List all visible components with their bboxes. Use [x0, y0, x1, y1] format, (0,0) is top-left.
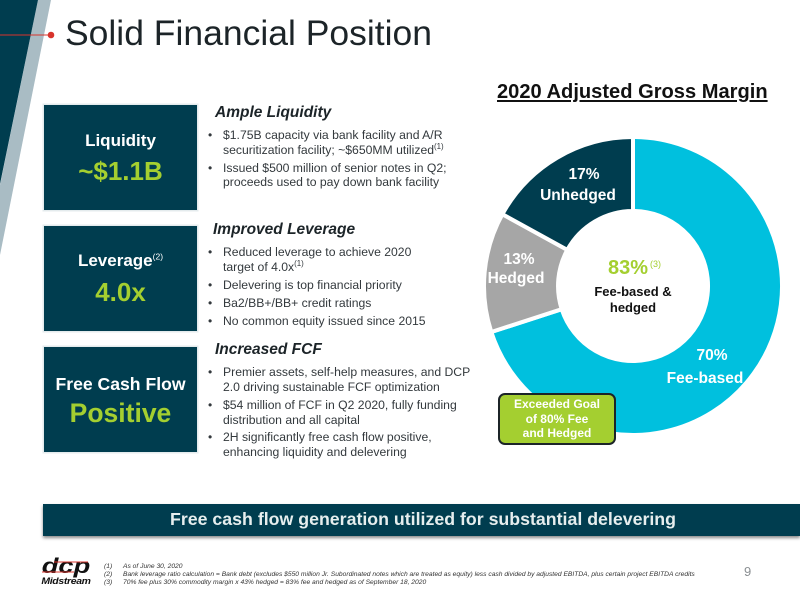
panel: leverage: [44, 226, 197, 331]
heading: improved leverage: Improved Leverage: [213, 221, 355, 238]
footnotes: As of June 30, 2020: [123, 563, 182, 570]
panel: free cash flow: [44, 347, 197, 452]
page number: 9: [744, 564, 751, 579]
free cash flow label: Free Cash Flow: [55, 374, 186, 394]
bullets: increased fcf: $54 million of FCF in Q2 2020, fully funding: [223, 398, 457, 412]
logo red stripes: [42, 562, 88, 572]
callout: exceeded goal: Exceeded Goal: [514, 397, 600, 411]
label: unhedged: [540, 166, 616, 204]
footnotes: 70% fee plus 30% commodity margin x 43% hedged = 83% fee and hedged as of September 18, 2020: [123, 579, 426, 586]
bullets: improved leverage: Delevering is top financial priority: [223, 278, 402, 292]
label: hedged: Hedged: [488, 270, 544, 287]
bullets: increased fcf: Premier assets, self-help measures, and DCP: [223, 365, 470, 379]
bullets: increased fcf: 2H significantly free cash flow positive,: [223, 430, 432, 444]
bullets: increased fcf: •: [208, 430, 212, 444]
title: Solid Financial Position: [65, 13, 432, 53]
free cash flow value: Positive: [70, 398, 171, 428]
liquidity value: ~$1.1B: [78, 156, 163, 186]
bullets: ample liquidity: securitization facility; ~$650MM utilized(1): [223, 142, 444, 157]
bullets: ample liquidity: $1.75B capacity via bank facility and A/R: [223, 128, 442, 142]
panel: liquidity: [44, 105, 197, 210]
bullets: ample liquidity: [208, 128, 447, 189]
center label: hedged: [610, 300, 656, 314]
heading: increased fcf: Increased FCF: [215, 341, 322, 358]
callout: exceeded goal: and Hedged: [523, 426, 591, 440]
logo letters: dcp: [42, 555, 90, 578]
liquidity label: Liquidity: [85, 131, 156, 150]
label: fee-based: 70%: [696, 347, 728, 364]
chart heading: 2020 Adjusted Gross Margin: [497, 81, 768, 103]
bullets: improved leverage: [208, 245, 426, 328]
bullets: improved leverage: Reduced leverage to achieve 2020: [223, 245, 411, 259]
bullets: increased fcf: distribution and all capital: [223, 413, 360, 427]
left accent shape: [0, 0, 51, 254]
footnotes: (3): [104, 579, 112, 586]
footnotes: (2): [104, 571, 112, 578]
donut chart: [486, 139, 780, 433]
bullets: improved leverage: •: [208, 278, 212, 292]
center label: Fee-based &: [594, 284, 672, 299]
label: hedged: [488, 251, 544, 287]
callout: exceeded goal: of 80% Fee: [526, 412, 588, 426]
label: fee-based: [667, 347, 743, 387]
bullets: increased fcf: •: [208, 365, 212, 379]
bullets: improved leverage: No common equity issued since 2015: [223, 314, 426, 328]
bullets: improved leverage: •: [208, 314, 212, 328]
banner: [43, 504, 800, 536]
bullets: increased fcf: •: [208, 398, 212, 412]
banner: Free cash flow generation utilized for substantial delevering: [170, 509, 676, 529]
label: hedged: 13%: [503, 251, 535, 268]
leverage value: 4.0x: [95, 277, 146, 307]
footnotes: [104, 563, 695, 586]
label: fee-based: Fee-based: [667, 370, 743, 387]
bullets: ample liquidity: •: [208, 128, 212, 142]
logo: dcp midstream: [41, 555, 91, 587]
callout: exceeded goal: [498, 393, 616, 445]
bullets: improved leverage: target of 4.0x(1): [223, 259, 304, 274]
bullets: increased fcf: 2.0 driving sustainable FCF optimization: [223, 380, 440, 394]
footnotes: Bank leverage ratio calculation = Bank debt (excludes $550 million Jr. Subordinated notes which are treated as equity) less cash divided by adjusted EBITDA, plus certain project EBITDA credits: [123, 571, 695, 578]
label: unhedged: Unhedged: [540, 187, 616, 204]
title marker line and dot: [0, 32, 54, 38]
label: unhedged: 17%: [568, 166, 600, 183]
bullets: ample liquidity: proceeds used to pay down bank facility: [223, 175, 439, 189]
bullets: ample liquidity: •: [208, 160, 212, 174]
bullets: ample liquidity: Issued $500 million of senior notes in Q2;: [223, 160, 447, 174]
bullets: improved leverage: Ba2/BB+/BB+ credit ratings: [223, 296, 371, 310]
bullets: increased fcf: enhancing liquidity and delevering: [223, 445, 407, 459]
leverage label: Leverage(2): [78, 251, 163, 270]
center label: [594, 284, 672, 314]
footnotes: (1): [104, 563, 112, 570]
bullets: increased fcf: [208, 365, 470, 459]
bullets: improved leverage: •: [208, 245, 212, 259]
center value: 83%(3): [608, 257, 661, 279]
bullets: improved leverage: •: [208, 296, 212, 310]
logo wordmark: Midstream: [41, 576, 91, 587]
heading: ample liquidity: Ample Liquidity: [215, 104, 331, 121]
